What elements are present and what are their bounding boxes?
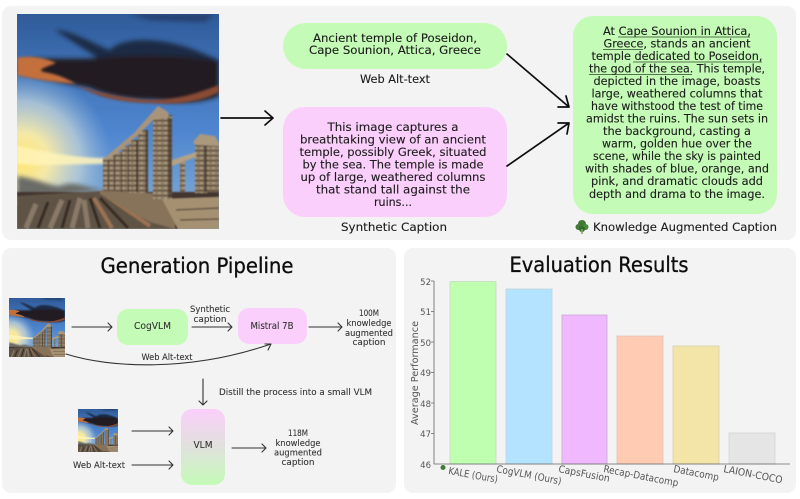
text: 118M output: caption <box>282 458 314 468</box>
knowledge augmented caption bubble <box>573 16 777 214</box>
image: temple thumbnail small <box>78 409 118 452</box>
text: 100M output: 100M <box>359 309 379 319</box>
x axis labels: CogVLM (Ours) <box>495 464 562 488</box>
y axis title: Average Performance <box>410 321 421 425</box>
text: 118M output: knowledge <box>276 439 321 449</box>
y axis tick labels: 46 <box>420 461 431 471</box>
arrow: image to CogVLM <box>72 323 112 331</box>
x axis labels: Datacomp <box>672 464 720 484</box>
synthetic caption bubble: temple, possibly Greek, situated <box>300 145 486 159</box>
arrow: CogVLM to Mistral <box>192 323 232 331</box>
arrow: curved web alt-text <box>66 344 271 365</box>
knowledge augmented caption bubble: depth and drama to the image. <box>589 187 765 201</box>
knowledge augmented caption bubble: pink, and dramatic clouds add <box>591 174 763 188</box>
knowledge augmented caption bubble: scene, while the sky is painted <box>593 149 761 163</box>
label: distill: Distill the process into a small VLM <box>219 388 372 398</box>
knowledge augmented caption bubble: amidst the ruins. The sun sets in <box>586 112 768 126</box>
arrow: VLM to output <box>232 444 266 452</box>
panel: generation pipeline <box>2 248 396 493</box>
knowledge augmented caption bubble: with shades of blue, orange, and <box>585 162 769 176</box>
web alt-text bubble <box>283 23 507 69</box>
bars <box>450 282 775 464</box>
synthetic caption bubble: that stand tall against the <box>316 182 470 196</box>
x axis labels <box>447 464 784 489</box>
y axis tick labels: 51 <box>420 308 431 318</box>
text: 100M output <box>345 309 393 348</box>
knowledge augmented caption bubble: temple dedicated to Poseidon, <box>592 49 762 63</box>
label: synthetic caption: caption <box>194 315 226 325</box>
arrow: alt-text to VLM <box>132 461 173 469</box>
box: Mistral 7B <box>238 308 307 344</box>
panel: caption comparison <box>2 6 796 240</box>
box: CogVLM: CogVLM <box>134 321 171 332</box>
label: web alt-text: Web Alt-text <box>360 72 430 86</box>
y axis tick labels: 47 <box>420 430 431 440</box>
arrow: Mistral to output <box>309 323 342 331</box>
y axis tick labels: 52 <box>420 278 431 288</box>
bar chart <box>410 278 790 489</box>
arrow: image to captions <box>221 111 273 125</box>
heading: evaluation results: Evaluation Results <box>510 253 688 278</box>
box: CogVLM <box>117 309 188 345</box>
x axis labels: KALE (Ours) <box>447 466 499 486</box>
text: 118M output: 118M <box>288 429 308 439</box>
label: web alt-text input: Web Alt-text <box>73 461 125 471</box>
text: 118M output <box>274 429 322 468</box>
image: temple of Poseidon photo <box>17 14 219 229</box>
knowledge augmented caption bubble: the god of the sea. This temple, <box>589 62 765 76</box>
box: VLM: VLM <box>194 440 212 451</box>
arrow: distill <box>199 379 207 405</box>
knowledge augmented caption bubble: At Cape Sounion in Attica, <box>603 24 751 38</box>
icon: small kale <box>440 465 446 470</box>
arrow: alt-text to augmented caption <box>507 54 569 107</box>
label: knowledge augmented caption: Knowledge Augmented Caption <box>593 220 777 234</box>
arrow: synthetic caption to augmented caption <box>507 123 569 166</box>
heading: generation pipeline: Generation Pipeline <box>100 254 294 279</box>
axes <box>431 281 790 464</box>
y axis tick labels <box>420 278 431 471</box>
image: temple thumbnail <box>9 298 65 357</box>
knowledge augmented caption bubble: Greece, stands an ancient <box>604 36 751 50</box>
knowledge augmented caption bubble: depicted in the image, boasts <box>594 74 761 88</box>
y axis tick labels: 48 <box>420 400 431 410</box>
text: 118M output: augmented <box>274 448 322 458</box>
knowledge augmented caption bubble: the background, casting a <box>603 124 751 138</box>
synthetic caption bubble: breathtaking view of an ancient <box>300 132 486 146</box>
arrow: image to VLM <box>132 427 173 435</box>
text: 100M output: knowledge <box>346 319 392 329</box>
label: synthetic caption <box>190 305 230 325</box>
knowledge augmented caption bubble: large, weathered columns that <box>592 86 763 100</box>
web alt-text bubble: Cape Sounion, Attica, Greece <box>309 43 481 57</box>
synthetic caption bubble <box>283 107 507 217</box>
label: synthetic caption: Synthetic <box>190 305 230 315</box>
icon: kale <box>576 220 588 234</box>
web alt-text bubble: Ancient temple of Poseidon, <box>313 31 477 45</box>
x axis labels: Recap-Datacomp <box>602 464 679 489</box>
x axis labels: CapsFusion <box>557 464 611 485</box>
panel: evaluation results <box>404 248 796 493</box>
synthetic caption bubble: This image captures a <box>326 120 458 134</box>
synthetic caption bubble: ruins... <box>374 195 412 209</box>
y axis tick labels: 50 <box>420 339 431 349</box>
text: 100M output: augmented <box>345 329 393 339</box>
synthetic caption bubble: up of large, weathered columns <box>300 170 486 184</box>
y axis tick labels: 49 <box>420 369 431 379</box>
x axis labels: LAION-COCO <box>722 464 784 486</box>
knowledge augmented caption bubble: have withstood the test of time <box>591 99 763 113</box>
label: web alt-text: Web Alt-text <box>142 353 193 363</box>
knowledge augmented caption bubble: warm, golden hue over the <box>602 136 752 150</box>
label: synthetic caption: Synthetic Caption <box>341 220 447 234</box>
text: 100M output: caption <box>352 338 386 348</box>
box: VLM <box>181 409 225 485</box>
box: Mistral 7B: Mistral 7B <box>250 321 294 332</box>
synthetic caption bubble: by the sea. The temple is made <box>302 158 484 172</box>
